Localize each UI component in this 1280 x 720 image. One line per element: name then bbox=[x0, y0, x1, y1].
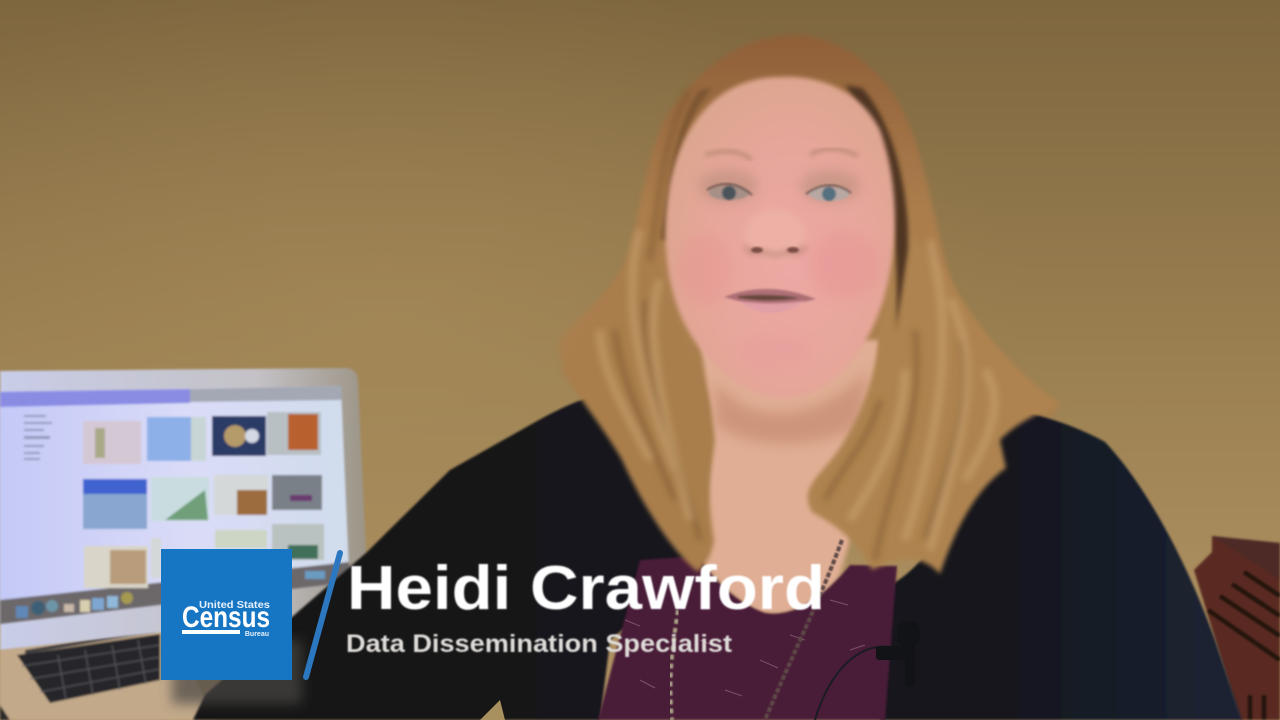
back hair bbox=[558, 35, 1060, 470]
Census Bureau logo: United States bbox=[199, 599, 270, 611]
maroon top bbox=[598, 556, 897, 720]
eyebrows bbox=[705, 149, 858, 160]
wooden furniture bbox=[1194, 536, 1280, 720]
laptop base and keyboard bbox=[0, 625, 215, 720]
laptop lid bbox=[0, 368, 366, 650]
darker strands bbox=[615, 90, 964, 560]
top flecks bbox=[625, 600, 865, 696]
job title: Data Dissemination Specialist bbox=[346, 630, 733, 658]
dock icons bbox=[16, 571, 325, 618]
cheek blush bbox=[809, 231, 881, 299]
map thumbnails bbox=[83, 421, 141, 464]
name: Heidi Crawford: Heidi Crawford bbox=[347, 554, 825, 623]
right eye bbox=[806, 185, 851, 201]
Census Bureau logo: Census bbox=[182, 601, 270, 634]
nose bbox=[745, 209, 806, 261]
hair strands bbox=[600, 90, 994, 560]
Census Bureau logo bbox=[161, 549, 292, 680]
eye shadows bbox=[698, 170, 758, 202]
Census Bureau logo: Bureau bbox=[245, 631, 269, 638]
dark hair shadow by face bbox=[660, 85, 908, 330]
face bbox=[666, 77, 895, 398]
lighter strands bbox=[600, 230, 994, 550]
mouth bbox=[724, 289, 816, 313]
necklace bbox=[670, 540, 842, 720]
cardigan bbox=[193, 392, 1242, 720]
logo shadow bbox=[172, 640, 302, 704]
laptop screen bbox=[0, 386, 350, 624]
slash divider bbox=[306, 553, 340, 677]
left eye bbox=[707, 184, 752, 200]
person bbox=[193, 35, 1242, 720]
front hair locks bbox=[562, 230, 1060, 574]
nostrils bbox=[751, 247, 799, 253]
neck and chest bbox=[698, 340, 880, 614]
microphone bbox=[815, 621, 920, 720]
laptop bbox=[0, 368, 366, 720]
